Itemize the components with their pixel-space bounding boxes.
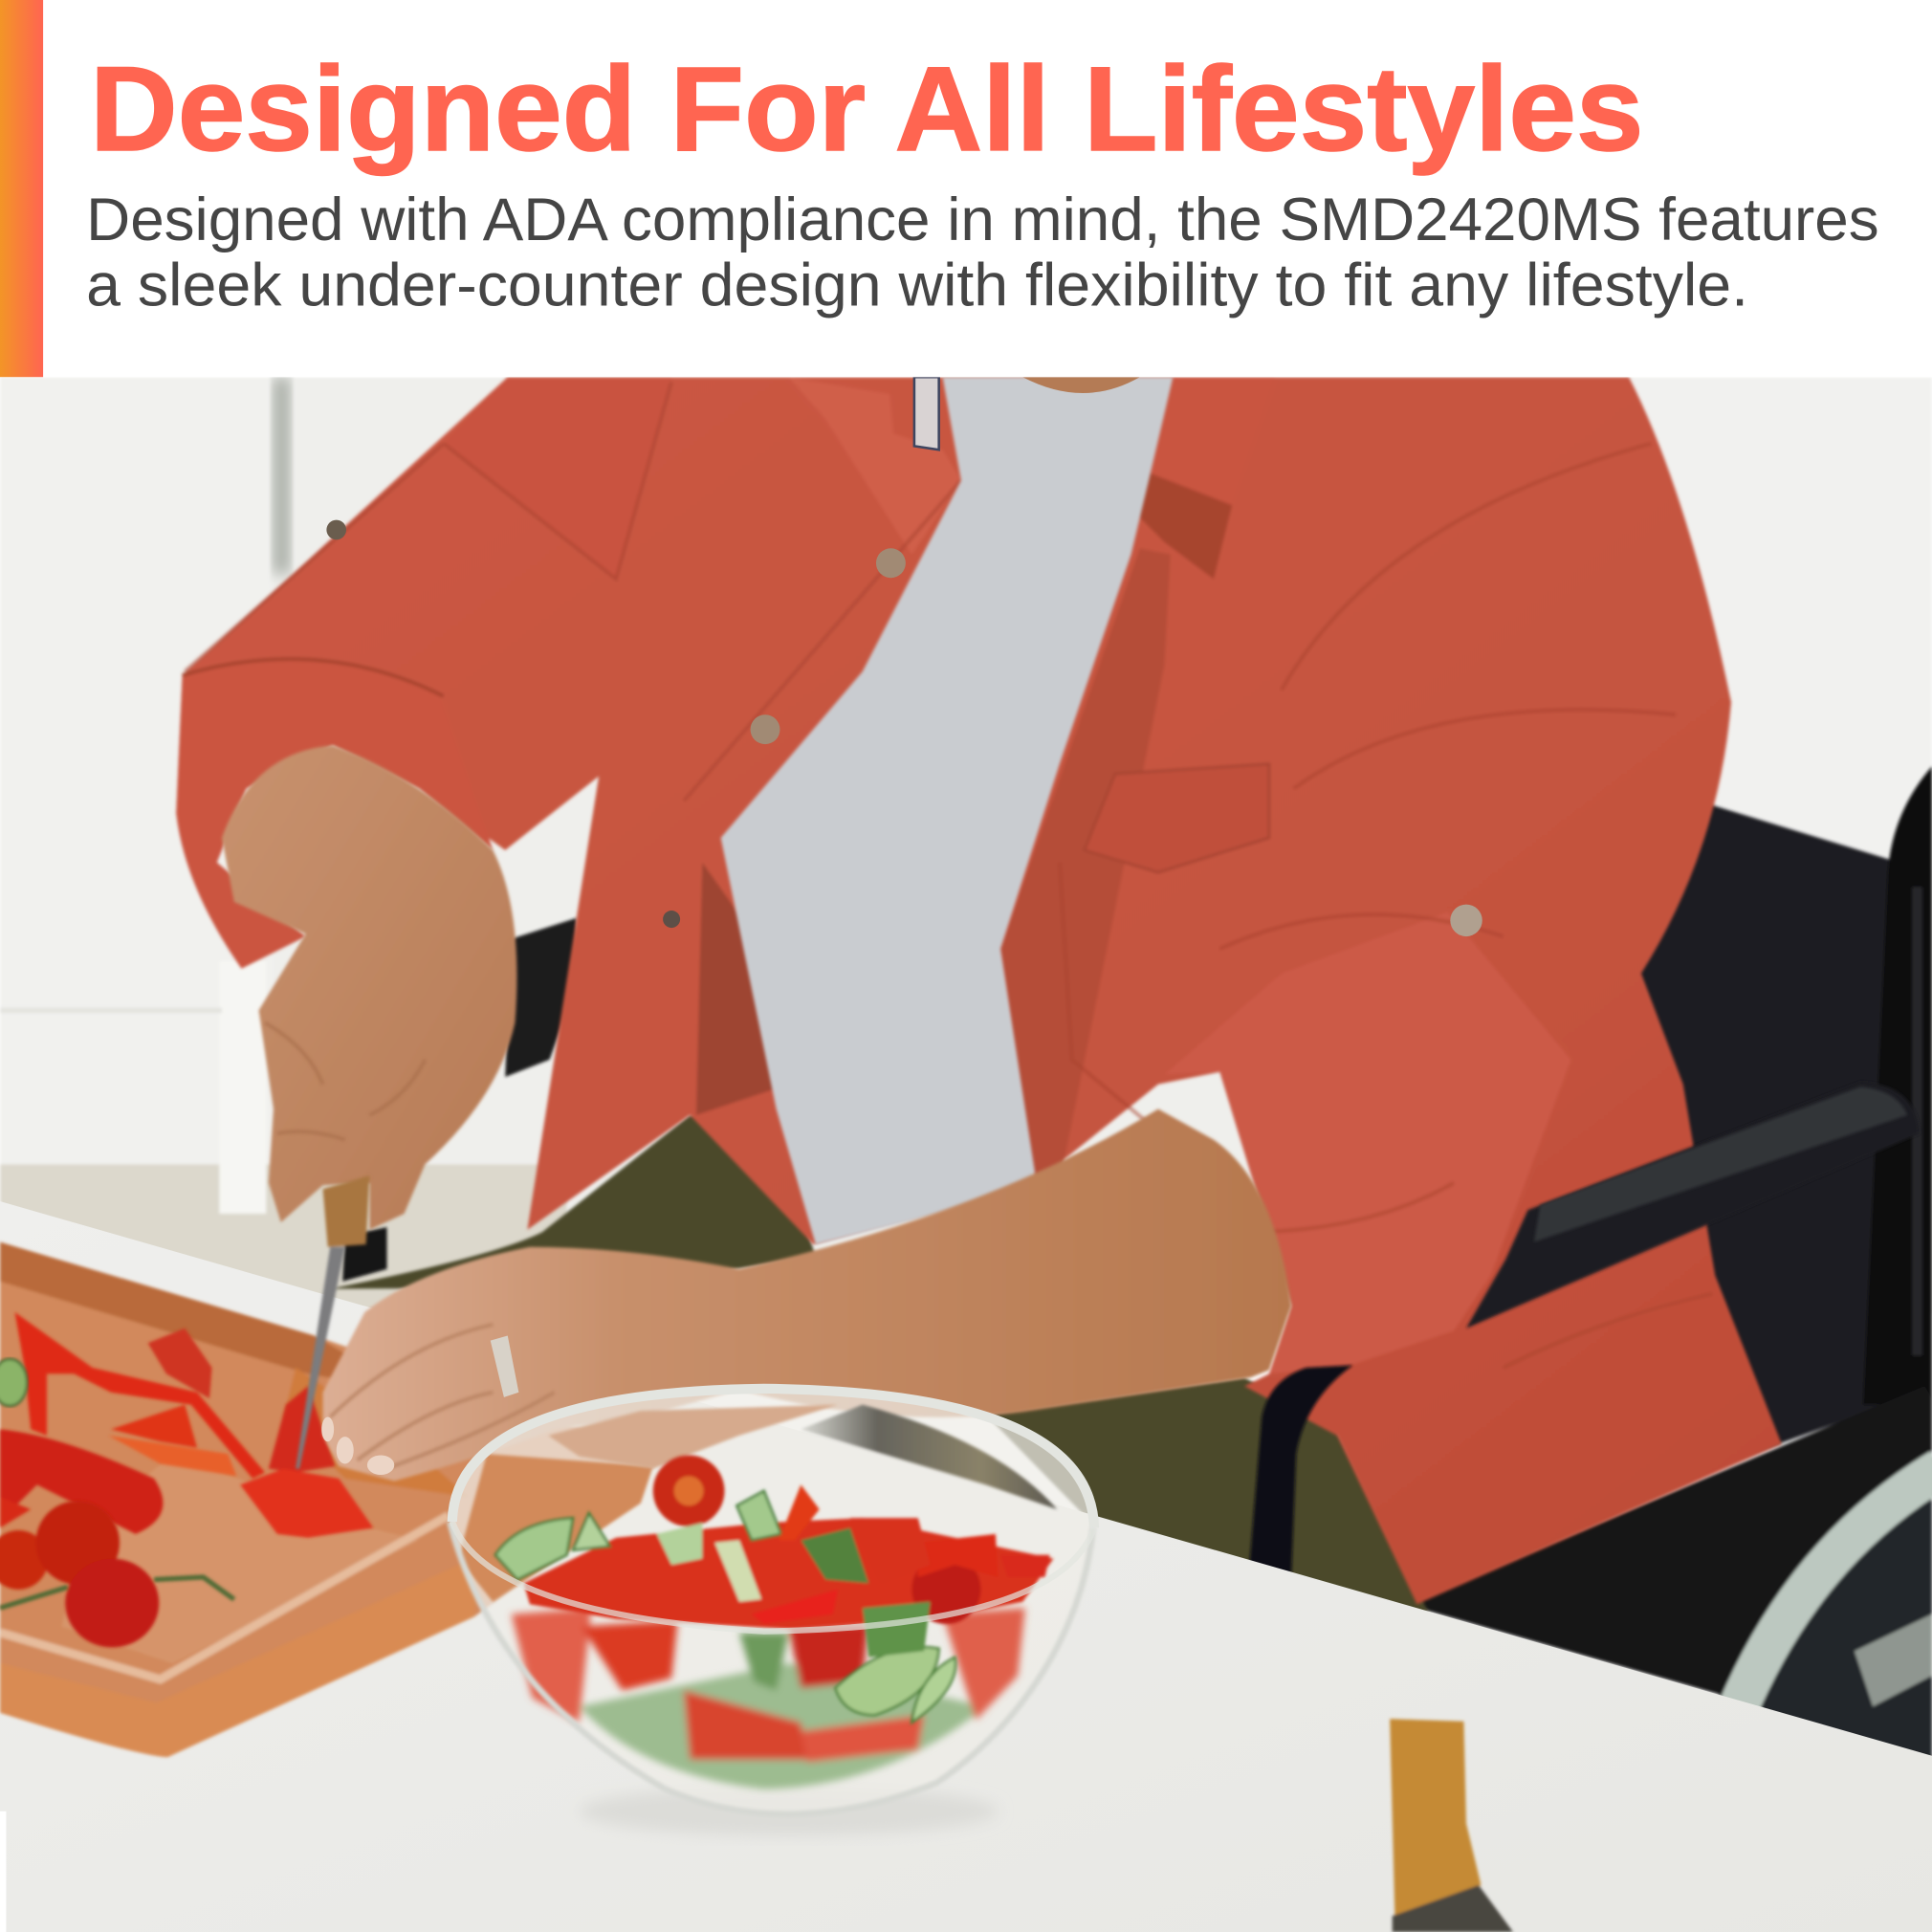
cherry tomato halves	[653, 1455, 725, 1526]
salad above the rim	[495, 1455, 1053, 1723]
header panel	[0, 0, 1932, 377]
bowl body	[450, 1389, 1093, 1814]
cherry tomatoes	[0, 1501, 234, 1647]
jacket inner panel	[696, 863, 781, 1115]
greens at bottom of bowl	[579, 1663, 986, 1789]
board wood patches	[61, 1454, 419, 1663]
subtitle	[86, 187, 1879, 318]
wheelchair armrest	[1466, 1082, 1920, 1328]
salad below the rim	[512, 1608, 1025, 1789]
red pepper strips	[0, 1312, 373, 1538]
wheel interior	[1756, 1497, 1932, 1756]
upper sleeve shadow	[511, 377, 670, 378]
red pepper accents	[918, 1534, 998, 1577]
subtitle: a sleek under-counter design with flexibility to fit any lifestyle.	[86, 252, 1748, 318]
shirt collar left	[788, 377, 961, 555]
sleeve roll left	[422, 790, 494, 850]
board surface	[0, 1242, 653, 1757]
glass bowl with salad	[450, 1389, 1094, 1836]
left hand knuckles	[265, 1022, 425, 1140]
jacket	[176, 377, 1782, 1604]
wheelchair left arm	[505, 918, 577, 1077]
wheelchair side panel	[1405, 1386, 1932, 1787]
subtitle: Designed with ADA compliance in mind, the SMD2420MS features	[86, 187, 1879, 253]
broccoli	[801, 1527, 868, 1583]
board front edge	[0, 1555, 480, 1757]
bowl rim	[452, 1389, 1094, 1527]
white corner sliver	[0, 1811, 6, 1932]
jacket folds	[185, 382, 1713, 1368]
board top edge	[0, 1242, 413, 1393]
wheelchair backrest	[1639, 803, 1892, 1454]
jacket silhouette	[176, 377, 1782, 1604]
title: Designed For All Lifestyles	[90, 43, 1644, 176]
collar stripe	[914, 377, 939, 450]
jacket pocket	[1085, 764, 1269, 872]
jacket buttons	[326, 520, 1482, 936]
bowl front rim	[452, 1522, 1094, 1632]
wedding ring	[491, 1335, 518, 1397]
fingernails	[321, 1417, 394, 1475]
hand seen through bowl	[548, 1405, 838, 1469]
steel knife reflection on bowl rim	[801, 1405, 1057, 1509]
table top	[0, 1201, 1932, 1932]
bowl shadow	[579, 1787, 998, 1836]
tomato and pepper mass	[524, 1518, 1053, 1629]
cucumber on board	[0, 1359, 27, 1406]
knife handle	[1390, 1719, 1481, 1916]
rolled cuff right	[1164, 911, 1571, 1373]
right arm and hand	[323, 1109, 1291, 1481]
lower left tomato pieces	[512, 1608, 591, 1723]
shirt collar right	[1131, 377, 1275, 505]
t-shirt	[721, 377, 1173, 1244]
wheelchair right frame	[1863, 766, 1932, 1405]
left forearm and hand	[222, 745, 516, 1230]
right hand finger creases	[330, 1325, 555, 1472]
knife blade	[1393, 1885, 1513, 1932]
wheel tyre	[1737, 1469, 1932, 1710]
kitchen background	[0, 377, 1932, 1313]
gradient accent bar	[0, 0, 43, 377]
front placket right	[1000, 548, 1171, 1183]
kitchen knife on table	[1390, 1719, 1513, 1932]
wheelchair	[342, 766, 1932, 1787]
neck skin	[1022, 377, 1140, 393]
board seen through bowl	[458, 1454, 653, 1602]
board juice groove	[0, 1516, 449, 1680]
cucumber slices	[495, 1518, 573, 1580]
wheelchair front tube	[1249, 1365, 1353, 1577]
knife held in left hand	[296, 1175, 369, 1469]
trousers	[330, 1115, 1441, 1638]
bowl outline	[450, 1522, 1093, 1814]
cutting board	[0, 1242, 653, 1757]
